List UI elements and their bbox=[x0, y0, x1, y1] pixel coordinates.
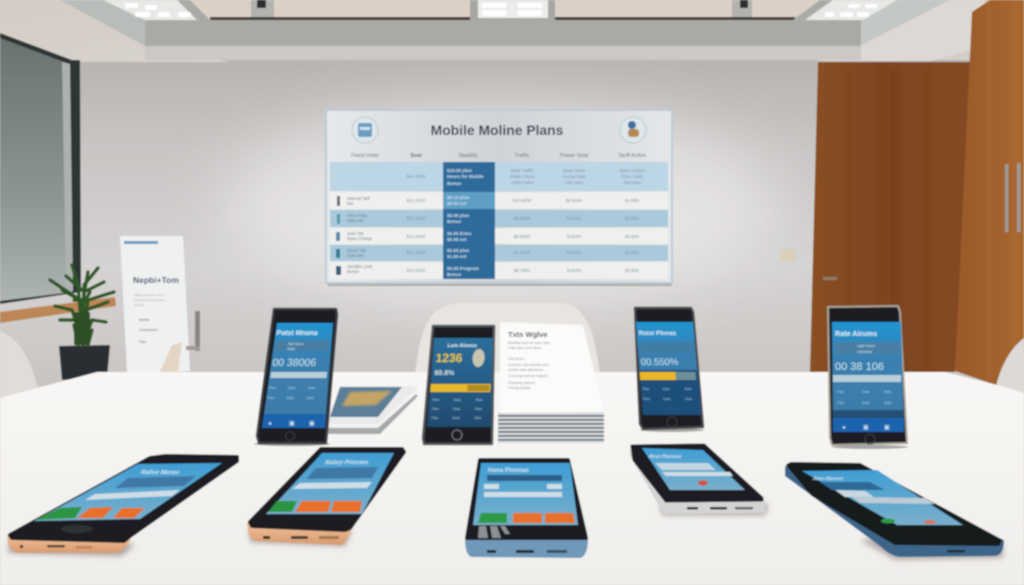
left chair bbox=[0, 331, 38, 402]
phone: standing 2 with clock: Plan bbox=[431, 416, 438, 420]
ceiling lights bbox=[103, 0, 897, 20]
sheet body text: Included call minutes and bbox=[508, 363, 549, 367]
table cell text: $10.88/00 bbox=[513, 198, 532, 203]
table cell text: $.50/00 bbox=[567, 250, 582, 255]
highlighted column: $8.19 plan bbox=[447, 195, 469, 200]
phone: standing 4 bbox=[828, 306, 908, 449]
brochure stack bbox=[328, 386, 418, 434]
row names: Data Net bbox=[347, 253, 364, 258]
table cell text: $15.10/00 bbox=[407, 216, 426, 221]
table cell text: $8.88/00 bbox=[514, 234, 531, 239]
phone: lying 1 copper bbox=[7, 456, 237, 556]
highlighted column: $6.95 plan bbox=[447, 248, 469, 253]
standing banner bbox=[120, 236, 190, 373]
table cell text: $.50/00 bbox=[567, 234, 582, 239]
table cell text: $15.10/00 bbox=[407, 268, 426, 273]
board title: Mobile Moline Plans bbox=[431, 122, 564, 138]
table cell text: Basic Traffic bbox=[511, 168, 533, 173]
table cell text: Stat rates bbox=[623, 180, 641, 185]
phone: standing 4: Rate bbox=[884, 390, 891, 394]
phone: standing 4: ▣ bbox=[884, 425, 890, 431]
phone: standing 1: Nat Saver bbox=[288, 342, 305, 346]
phone: standing 3: 00.550% bbox=[640, 357, 679, 368]
wooden sill bbox=[0, 297, 116, 323]
phone: lying 5 navy: Rate Plannes bbox=[811, 477, 845, 482]
board right icon bbox=[620, 117, 646, 143]
standing banner: Nepbi+Tom bbox=[133, 275, 179, 285]
table header labels: Power Seat bbox=[560, 153, 589, 159]
highlighted column: $1.95 ext bbox=[447, 254, 467, 259]
potted plant bbox=[50, 265, 114, 380]
phone: standing 4: 00 38 106 bbox=[835, 361, 884, 373]
highlighted column: Bonus bbox=[447, 272, 462, 277]
sheet body text: Pricing details bbox=[508, 386, 531, 390]
phone: standing 1: ▣ bbox=[289, 421, 295, 427]
door handles bbox=[1005, 163, 1020, 232]
sheet body text: Coverage across regions bbox=[508, 374, 548, 378]
sheet body text: Data rates and offers bbox=[508, 346, 542, 350]
highlighted column: $9.95 Program bbox=[447, 266, 479, 271]
phone: standing 4: Unlimited bbox=[857, 350, 872, 354]
table cell text: $3.80/0 bbox=[625, 234, 640, 239]
table header labels bbox=[351, 153, 646, 159]
ceiling vents bbox=[251, 0, 752, 17]
phone: standing 4: Rate bbox=[884, 401, 891, 405]
phone: standing 2 with clock: Data bbox=[454, 398, 461, 402]
table cell text: $2.80/0 bbox=[625, 198, 640, 203]
highlighted column: $8.95 ext bbox=[447, 237, 467, 242]
table cell text: $8.78/00 bbox=[514, 268, 531, 273]
phone: lying 4 silver: Rest Plannas bbox=[647, 454, 683, 460]
sheet heading: Txts Wglve bbox=[508, 330, 548, 339]
phone: standing 4: ▣ bbox=[863, 425, 869, 431]
row names: Internal Tarif bbox=[347, 196, 371, 201]
table cell text: $1.10/00 bbox=[514, 250, 531, 255]
phone: standing 1: ◂ bbox=[268, 421, 271, 427]
highlighted column: $19.95 plan bbox=[447, 168, 472, 173]
phone: lying 1 copper: Rafive Manas bbox=[139, 469, 181, 476]
room background bbox=[0, 0, 1024, 392]
phone: standing 4: Rate Airums bbox=[835, 329, 877, 338]
table cell text: Access Rate bbox=[562, 174, 586, 179]
highlighted column: Bonus bbox=[447, 219, 462, 224]
door pull by banner bbox=[186, 311, 200, 351]
phone: standing 2 with clock: Plan bbox=[432, 407, 439, 411]
phone: standing 1: Rate bbox=[308, 386, 316, 390]
standing banner: Mobile plans for every bbox=[134, 293, 164, 297]
wall board: plan comparison table bbox=[325, 109, 673, 286]
phone: standing 2 with clock: Rate bbox=[475, 407, 482, 411]
table cell text: $.50/00 bbox=[567, 216, 582, 221]
phone: standing 2 with clock: Data bbox=[453, 407, 460, 411]
table cell text: Basic Access bbox=[620, 168, 644, 173]
table header labels: Traffic bbox=[515, 153, 530, 159]
row names: Variable Limit bbox=[347, 264, 373, 269]
table header labels: Fixed Hotel bbox=[351, 153, 379, 159]
phone: standing 1: Plan bbox=[267, 396, 275, 400]
centre chair back bbox=[415, 303, 600, 375]
phone: standing 1: Data bbox=[288, 386, 296, 390]
sheet body text bbox=[508, 341, 550, 390]
phone: lying 5 navy bbox=[785, 463, 1004, 560]
row names: Data Net bbox=[347, 218, 364, 223]
standing banner: Mobile bbox=[139, 318, 149, 322]
table rows bbox=[330, 162, 668, 279]
phone: standing 3: Data bbox=[663, 397, 671, 401]
sheet body text: mobile data allowance bbox=[508, 368, 544, 372]
phone: lying 4 silver bbox=[629, 445, 768, 515]
wall spotlight bbox=[220, 105, 780, 305]
table cell text: Add rates bbox=[565, 180, 583, 185]
table header labels: Stability bbox=[458, 153, 478, 159]
table cell text: $16.10/00 bbox=[407, 234, 426, 239]
highlighted column bbox=[443, 162, 495, 279]
phone: standing 1: ▣ bbox=[309, 421, 315, 427]
table cell text: $45.10/00 bbox=[407, 174, 426, 179]
phone: standing 2 with clock: Rate bbox=[474, 416, 482, 420]
wood wall panel bbox=[955, 0, 1024, 392]
phone: standing 4: Light Saver bbox=[857, 344, 876, 348]
phone: standing 4: Plan bbox=[837, 390, 844, 394]
phone: standing 1: Data bbox=[286, 396, 294, 400]
door bbox=[810, 62, 972, 372]
phone: standing 2 with clock: Data bbox=[452, 416, 460, 420]
highlighted column: $8.95 ext bbox=[447, 201, 467, 206]
row names: Bonus bbox=[347, 269, 359, 274]
paper stack bbox=[498, 322, 604, 443]
row names: Voice Rate bbox=[347, 213, 368, 218]
sheet body text: Roaming options bbox=[508, 381, 535, 385]
row names: Start Tab bbox=[347, 231, 364, 236]
phone: standing 3: Plan bbox=[643, 387, 650, 391]
table cell text: Added rates bbox=[511, 180, 533, 185]
row names: Direct Tab bbox=[347, 248, 366, 253]
phone: lying 3 blue bbox=[465, 460, 588, 558]
phone: standing 2 with clock bbox=[423, 326, 494, 444]
standing banner: Plan bbox=[139, 340, 146, 344]
table cell text bbox=[407, 168, 644, 273]
phone: standing 2 with clock: 80.8% bbox=[434, 370, 455, 377]
phone: standing 3: Rstst Plnnas bbox=[639, 330, 677, 337]
phone: standing 2 with clock: Lam Aluous bbox=[447, 343, 477, 349]
table cell text: Basic Seats bbox=[563, 168, 585, 173]
standing banner: service bbox=[134, 303, 144, 307]
table header labels: Seat bbox=[410, 153, 422, 159]
phone: lying 2 copper: Salary Proxnes bbox=[323, 459, 370, 466]
phone: standing 1: Rate bbox=[306, 396, 314, 400]
right chair bbox=[996, 338, 1024, 396]
phone: standing 1: Data bbox=[287, 347, 295, 351]
highlighted column: $6.95 Extra bbox=[447, 231, 472, 236]
table cell text: $12.10/00 bbox=[407, 250, 426, 255]
phone: standing 2 with clock: Rate bbox=[476, 398, 483, 402]
row names: Basic Charge bbox=[347, 236, 373, 241]
table top bbox=[0, 372, 1024, 585]
table cell text: $1.50/0 bbox=[625, 250, 640, 255]
standing banner: business and personal bbox=[134, 298, 164, 302]
phone: standing 1: Plan bbox=[269, 386, 276, 390]
phone: standing 4: Plan bbox=[837, 401, 844, 405]
phone: standing 1: Patst Mnana bbox=[276, 330, 318, 337]
board panel bbox=[325, 109, 673, 284]
row icons bbox=[336, 196, 341, 275]
standing banner: Comparison bbox=[139, 328, 158, 332]
highlighted column: Bonus bbox=[447, 181, 462, 186]
stack of sheets bbox=[498, 412, 604, 443]
phone: standing 4: Data bbox=[862, 390, 869, 394]
table cell text: $.50/00 bbox=[567, 268, 582, 273]
table cell text: $8.80/0 bbox=[625, 268, 640, 273]
phone: standing 3: Rate bbox=[685, 387, 692, 391]
table cell text: $15.10/00 bbox=[407, 198, 426, 203]
phone: standing 4: ◂ bbox=[842, 425, 845, 431]
table cell text: $2.80/0 bbox=[625, 216, 640, 221]
phone: standing 3: Data bbox=[663, 387, 670, 391]
table cell text: $2.50/00 bbox=[566, 198, 583, 203]
table cell text: Mobile Hours bbox=[510, 174, 534, 179]
wall bbox=[0, 46, 1024, 386]
sheet body text: Key terms bbox=[508, 357, 524, 361]
window bbox=[0, 33, 81, 304]
highlighted column: $8.95 plan bbox=[447, 213, 469, 218]
phone: standing 4: Data bbox=[862, 401, 869, 405]
table header labels: Tariff Active bbox=[618, 153, 646, 159]
light switch bbox=[781, 249, 795, 261]
phone: lying 3 blue: Hana Pionnas bbox=[488, 467, 529, 474]
board left icon bbox=[352, 117, 378, 143]
phone: standing 2 with clock: 1236 bbox=[435, 351, 463, 365]
phone: standing 3: Plan bbox=[643, 397, 650, 401]
front sheet bbox=[500, 322, 604, 413]
phone: standing 2 with clock: Plan bbox=[433, 398, 440, 402]
phone: lying 2 copper bbox=[247, 449, 404, 546]
table cell text: $8.88/00 bbox=[514, 216, 531, 221]
row names bbox=[347, 196, 373, 274]
table cell text: Short Cable bbox=[621, 174, 644, 179]
row names: Net bbox=[347, 201, 354, 206]
phone: standing 3: Rate bbox=[685, 397, 693, 401]
phone: standing 1: 00 38006 bbox=[272, 357, 317, 369]
highlighted column: Hours for Mobile bbox=[447, 174, 484, 179]
sheet body text: Monthly fees for each plan bbox=[508, 341, 550, 345]
phone: standing 1 bbox=[254, 309, 337, 446]
ceiling bbox=[0, 0, 1024, 62]
phone: standing 3 bbox=[635, 308, 704, 432]
